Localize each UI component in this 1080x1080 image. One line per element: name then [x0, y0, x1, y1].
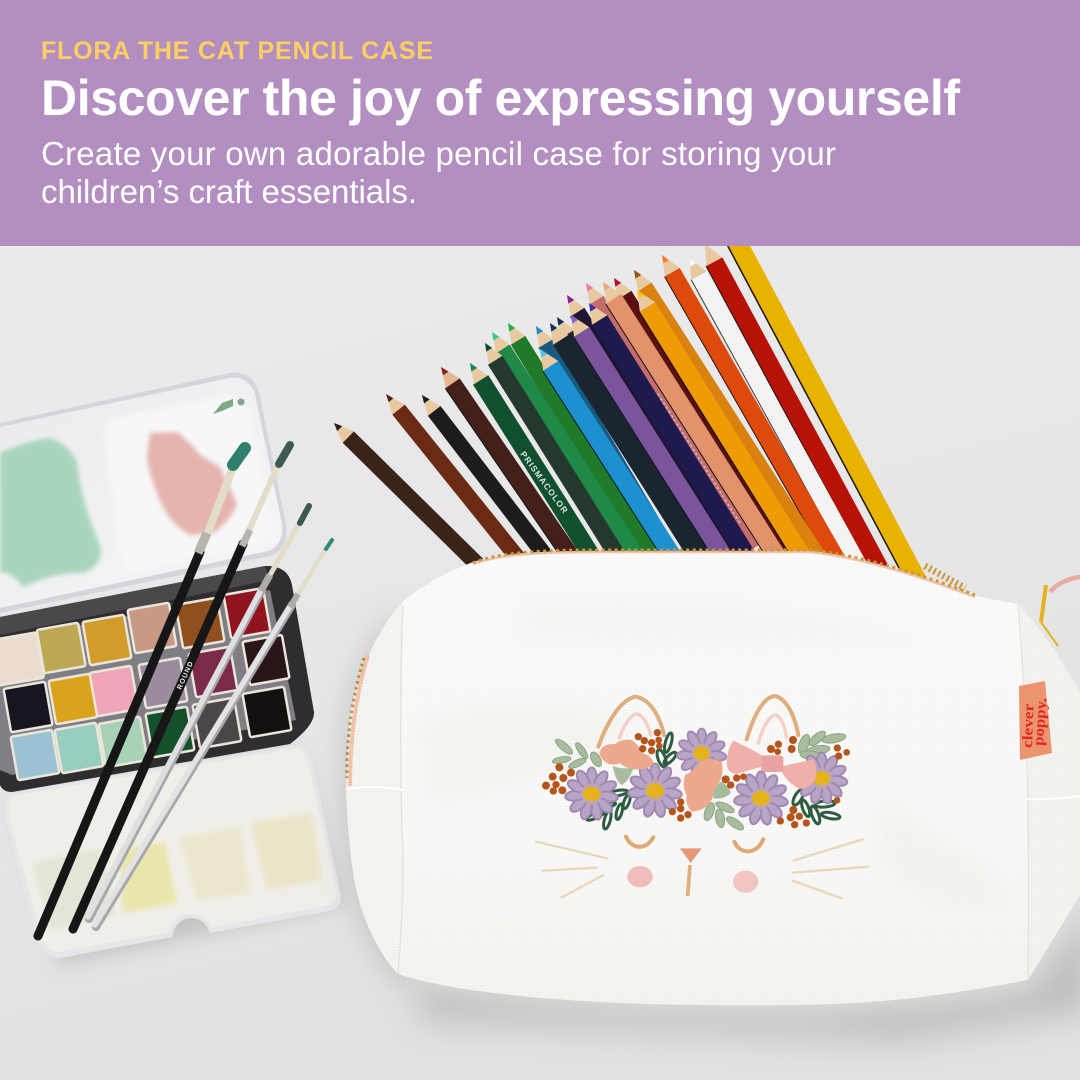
green pencil 2 [500, 319, 661, 565]
hidden back pencils [528, 274, 792, 570]
brush 4 [95, 540, 332, 927]
left zipper edge [347, 655, 368, 786]
bag shadow [346, 610, 1080, 1040]
fabric soft creases [420, 595, 1010, 905]
banner background [0, 0, 1080, 246]
eyebrow label: FLORA THE CAT PENCIL CASE [41, 37, 433, 65]
pencil brand imprint: PRISMACOLOR [518, 449, 571, 517]
lid compartments [105, 396, 273, 572]
brush 1 [38, 448, 245, 936]
left gusset shading [346, 603, 404, 974]
paint pan tray [0, 566, 314, 792]
purple pencil [563, 310, 733, 565]
palette upper lid [0, 373, 286, 613]
navy pencil [581, 298, 755, 561]
zipper teeth [473, 550, 975, 595]
colored pencils [328, 233, 933, 599]
cat mouth line [688, 865, 690, 896]
grey-green pencil [477, 339, 626, 563]
mixing wells [32, 813, 322, 930]
pencil case [346, 550, 1080, 1040]
description: children’s craft essentials. [41, 173, 417, 210]
row 3 paint pans [10, 687, 292, 780]
palette shadow [8, 750, 345, 965]
peach flower left [599, 740, 654, 769]
paint brushes [38, 445, 332, 936]
brush 3 [88, 506, 309, 919]
blue pencil [532, 344, 684, 568]
brand tag: clever [1020, 703, 1038, 748]
main heading: Discover the joy of expressing yourself [41, 70, 960, 126]
sage leaf beside centre flower [713, 782, 731, 799]
red-brown pencil [380, 389, 526, 566]
brush 2 [73, 445, 290, 929]
cat eyes [626, 837, 763, 851]
navy pencil imprint [658, 394, 740, 523]
brand tag [1019, 681, 1052, 760]
red-orange pencil [654, 251, 848, 571]
dark orange pencil [626, 266, 829, 569]
black-navy pencil [542, 318, 707, 564]
row 2 paint pans [3, 635, 290, 732]
green paint wash [0, 438, 101, 587]
right gusset shading [1018, 604, 1080, 980]
cat nose [680, 848, 702, 863]
fabric folds [398, 604, 1029, 980]
watercolor palette [0, 373, 345, 965]
cat ears [598, 696, 798, 747]
red pencil [696, 240, 888, 574]
exposed zipper teeth [925, 566, 965, 588]
cat embroidery [536, 696, 868, 898]
cat cheeks [627, 866, 758, 893]
brush 2 handle label: ROUND [176, 660, 195, 691]
orange pencil [629, 285, 815, 571]
dark green leaf sprigs [586, 732, 840, 830]
brand tag: poppy. [1031, 697, 1050, 746]
green paint speck [213, 399, 233, 414]
orange berries [542, 729, 850, 828]
black pencil [416, 390, 553, 562]
row 1 paint pans [0, 588, 271, 686]
pink paint wash [147, 432, 237, 535]
cat whiskers [536, 839, 868, 898]
green pencil 1 [484, 328, 644, 563]
bag body [346, 551, 1080, 1005]
dark green pencil [462, 358, 602, 566]
fabric weave [346, 551, 1080, 1005]
white pencil [681, 254, 867, 573]
sage leaf under left flower [613, 766, 634, 785]
palette lower mixing lid [5, 745, 341, 958]
purple daisies [565, 728, 848, 826]
sage leaf sprigs [552, 729, 847, 832]
zipper tape [473, 552, 975, 597]
dark brown pencil [328, 417, 488, 575]
gusset seams [346, 787, 1080, 799]
yellow pencil [725, 233, 933, 599]
zipper pull and ribbon [1041, 577, 1080, 646]
description: Create your own adorable pencil case for storing your [41, 135, 836, 172]
pink bow [727, 741, 816, 789]
peach flower centre [684, 759, 723, 812]
header banner [0, 0, 1080, 246]
salmon pencil [595, 277, 787, 565]
brown-red pencil [434, 362, 581, 565]
